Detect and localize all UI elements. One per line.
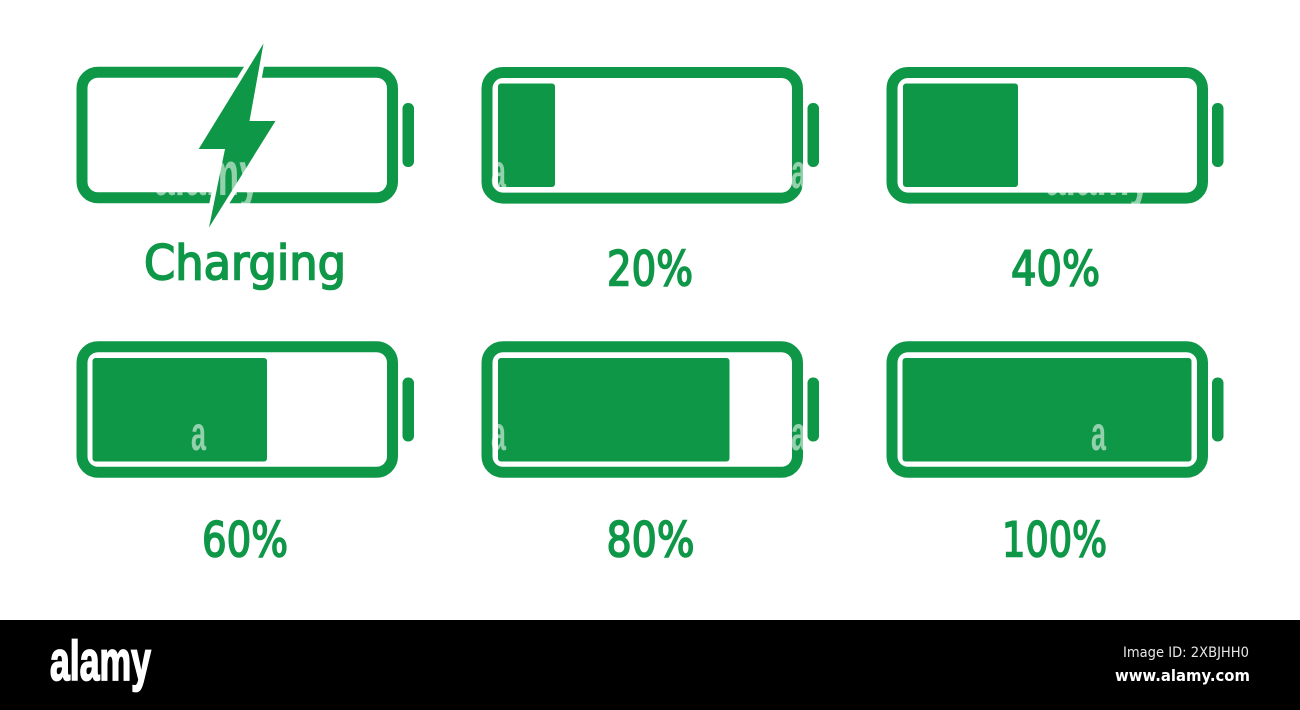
label: 20%: 20% — [607, 242, 693, 298]
battery: 60% — [82, 347, 414, 472]
watermark fragments: a — [791, 408, 806, 461]
label: 100%: 100% — [1002, 512, 1107, 568]
label: Charging: Charging — [144, 236, 346, 292]
charge level 20% — [498, 84, 555, 187]
charge level 100% — [902, 358, 1192, 462]
watermark fragments: a — [491, 146, 506, 199]
label: 80%: 80% — [606, 512, 694, 568]
battery: 80% — [487, 347, 819, 472]
watermark fragments: alamy — [154, 140, 260, 209]
charge level 80% — [498, 358, 730, 462]
watermark fragments: a — [491, 408, 506, 461]
icon: lightning bolt — [199, 44, 276, 228]
watermark fragments: a — [191, 408, 206, 461]
battery: 40% — [892, 72, 1224, 198]
battery: charging — [82, 44, 414, 228]
charge level 60% — [92, 358, 267, 462]
battery: 100% — [892, 347, 1224, 472]
website: www.alamy.com — [1115, 666, 1250, 685]
watermark fragments: a — [791, 146, 806, 199]
image ID: Image ID: 2XBJHH0 — [1123, 645, 1249, 661]
watermark fragments: a — [1091, 408, 1106, 461]
watermark fragments — [154, 140, 1150, 461]
watermark fragments: alamy — [1045, 140, 1150, 209]
charge level 40% — [903, 84, 1018, 187]
battery: 20% — [487, 72, 819, 198]
logo: alamy: alamy — [50, 629, 151, 692]
label: 60%: 60% — [202, 512, 288, 568]
footer band — [0, 620, 1300, 710]
label: 40%: 40% — [1011, 242, 1100, 298]
